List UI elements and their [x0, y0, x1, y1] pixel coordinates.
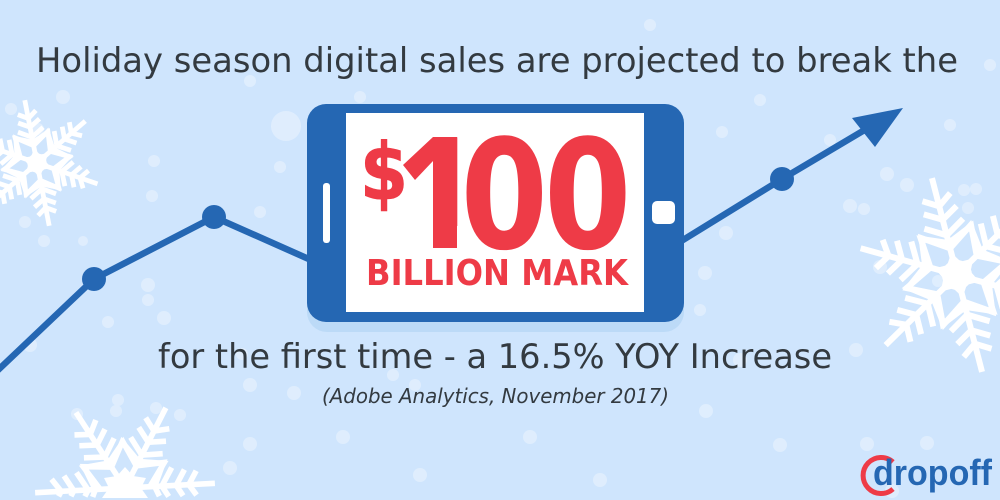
amount 100: [395, 107, 632, 284]
phone button: [652, 201, 675, 224]
snowflake: bottom left: [34, 397, 215, 500]
amount 100: 0: [460, 107, 548, 284]
growth line left: [0, 205, 320, 372]
source: (Adobe Analytics, November 2017): [322, 384, 669, 408]
phone: [307, 104, 684, 332]
snowflake: top left: [0, 100, 98, 226]
billion mark: BILLION MARK: [366, 253, 629, 294]
snowflake: right: [860, 178, 1000, 372]
title: Holiday season digital sales are projected to break the: [36, 41, 958, 81]
phone speaker slot: [323, 183, 330, 243]
amount 100: 1: [401, 107, 486, 284]
phone screen: [346, 113, 644, 312]
amount 100: 0: [544, 107, 632, 284]
dollar sign: $: [360, 128, 408, 218]
subtitle: for the first time - a 16.5% YOY Increase: [158, 337, 832, 377]
growth arrow right: [670, 108, 903, 248]
logo: dropoff: dropoff: [873, 452, 993, 493]
